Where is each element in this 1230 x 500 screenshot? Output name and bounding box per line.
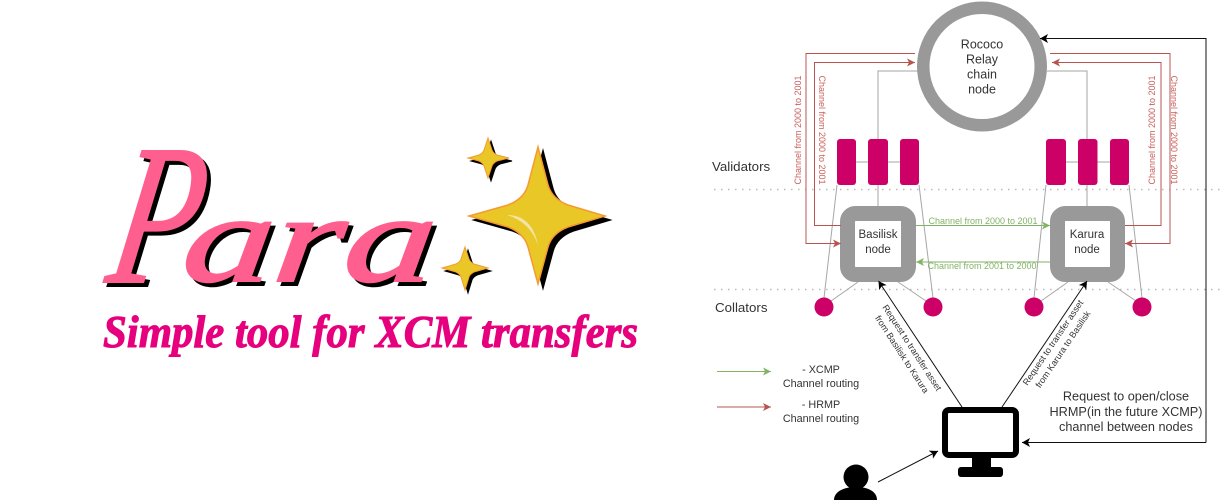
divider: collators level bbox=[714, 288, 1222, 290]
logo: small sparkle bottom bbox=[442, 247, 488, 290]
legend: XCMP: - XCMP bbox=[802, 364, 840, 376]
logo: Para wordmark: ara bbox=[177, 170, 444, 309]
request label: Karura to Basilisk: Request to transfer asset bbox=[1021, 298, 1086, 387]
legend: HRMP bbox=[717, 399, 859, 425]
Basilisk node: node bbox=[865, 244, 891, 256]
collators bbox=[814, 298, 1152, 316]
tagline: Simple tool for XCM transfers bbox=[103, 306, 638, 357]
XCMP channel labels: Channel from 2000 to 2001 bbox=[928, 216, 1038, 226]
relay chain node: Rococo bbox=[961, 38, 1003, 52]
Basilisk node bbox=[848, 214, 908, 274]
Karura node: Karura bbox=[1070, 229, 1105, 241]
request label: Basilisk to Karura: from Basilisk to Karura bbox=[873, 314, 931, 395]
legend: XCMP bbox=[717, 364, 859, 390]
HRMP channel labels: Channel from 2000 to 2001 bbox=[793, 75, 803, 185]
Karura node bbox=[1058, 214, 1118, 274]
collators label: Collators bbox=[715, 300, 768, 315]
relay chain node: chain bbox=[967, 68, 997, 82]
validators right bbox=[1046, 139, 1129, 185]
Karura node: node bbox=[1074, 244, 1100, 256]
HRMP channel labels bbox=[793, 75, 1179, 185]
legend: HRMP: - HRMP bbox=[802, 399, 840, 411]
legend: XCMP: Channel routing bbox=[783, 378, 859, 390]
request label: Basilisk to Karura: Request to transfer asset bbox=[880, 303, 944, 393]
validators label: Validators bbox=[712, 159, 770, 174]
XCMP channel labels: Channel from 2001 to 2000 bbox=[927, 261, 1037, 271]
request open/close label: channel between nodes bbox=[1059, 420, 1193, 434]
logo: small sparkle top bbox=[468, 138, 509, 178]
relay chain node bbox=[923, 8, 1041, 125]
logo: Para wordmark bbox=[95, 105, 444, 326]
HRMP channel routes bbox=[806, 54, 1170, 244]
logo: large sparkle bbox=[469, 147, 605, 284]
relay chain node: Relay bbox=[966, 52, 999, 66]
icon: monitor bbox=[945, 410, 1016, 477]
request label: Karura to Basilisk: from Karura to Basilisk bbox=[1034, 309, 1093, 390]
HRMP channel labels: Channel from 2000 to 2001 bbox=[1147, 75, 1157, 185]
gray connectors bbox=[824, 71, 1142, 301]
icon: user bbox=[834, 464, 877, 500]
divider: validators level bbox=[714, 188, 1222, 190]
HRMP channel labels: Channel from 2000 to 2001 bbox=[1169, 75, 1179, 185]
logo: Para wordmark: P bbox=[95, 105, 223, 326]
relay chain node: node bbox=[968, 82, 996, 96]
HRMP channel labels: Channel from 2000 to 2001 bbox=[817, 75, 827, 185]
request open/close label: HRMP(in the future XCMP) bbox=[1050, 405, 1202, 419]
request open/close label: Request to open/close bbox=[1063, 390, 1189, 404]
XCMP channel labels bbox=[927, 216, 1038, 271]
XCMP channel routes bbox=[916, 226, 1050, 262]
legend: HRMP: Channel routing bbox=[783, 413, 859, 425]
validators left bbox=[837, 139, 919, 185]
Basilisk node: Basilisk bbox=[859, 229, 898, 241]
black request arrows bbox=[878, 38, 1206, 482]
